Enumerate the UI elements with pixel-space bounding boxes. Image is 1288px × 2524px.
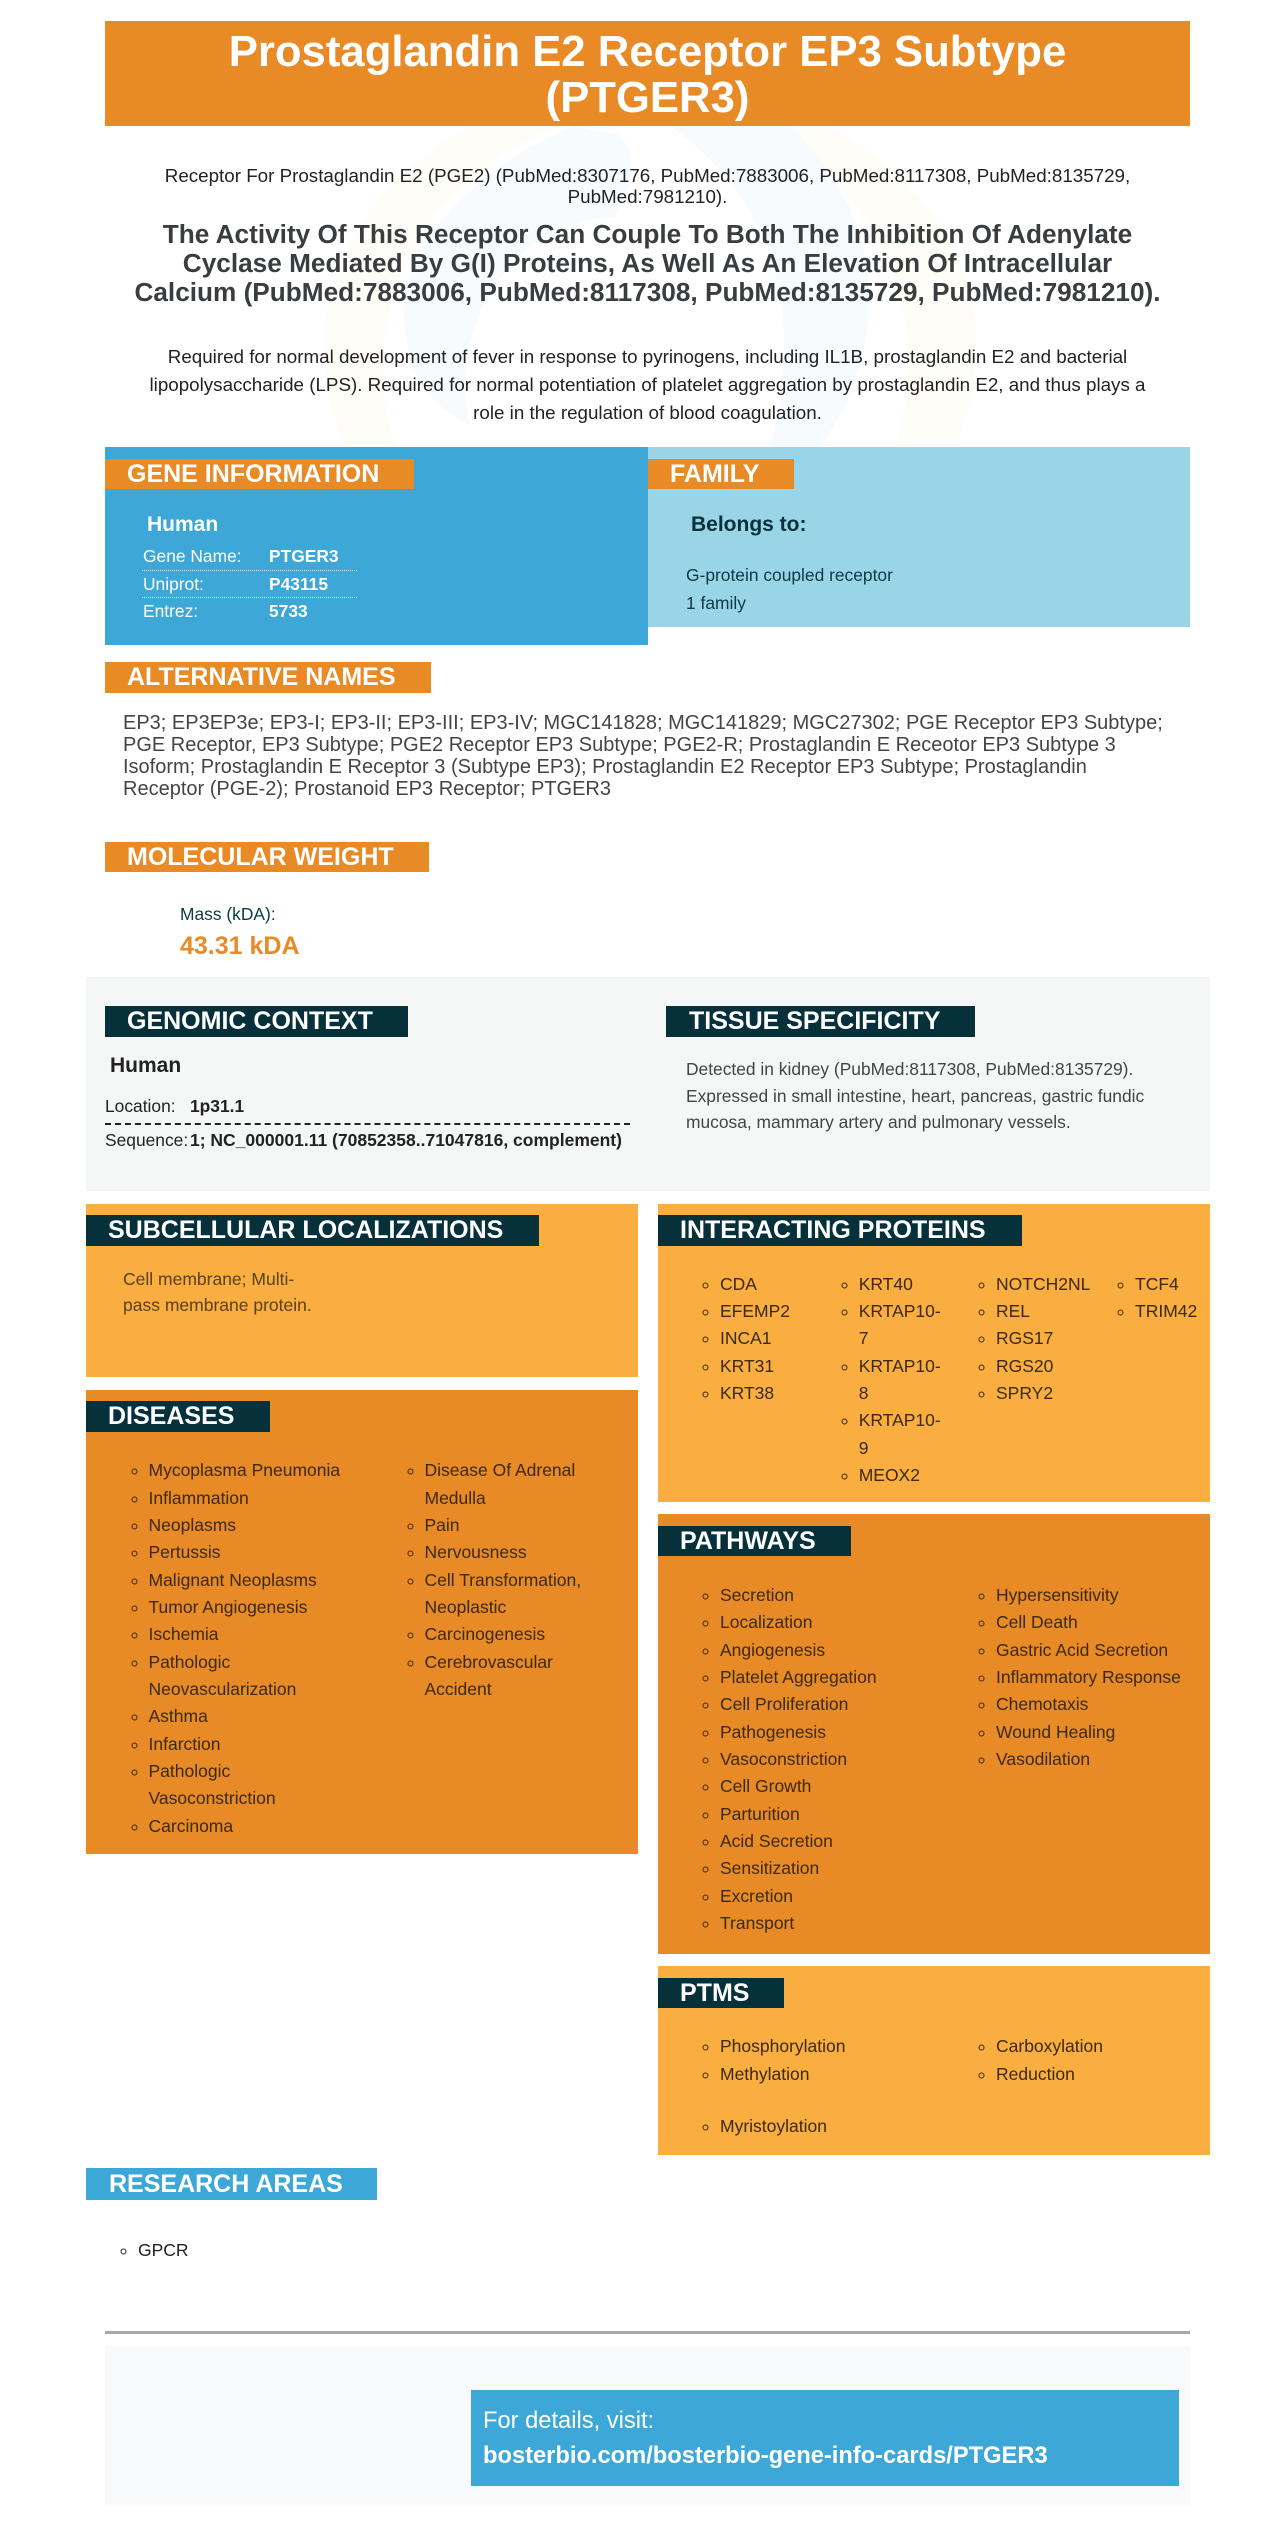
panel: genomic context and tissue specificity: 1; NC_000001.11 (70852358..71047816, complement) xyxy=(190,1130,622,1150)
list: diseases column 1: Asthma xyxy=(148,1706,208,1726)
panel: ptms xyxy=(658,1966,1210,2155)
list: proteins column 2: MEOX2 xyxy=(859,1465,920,1485)
list: proteins column 2: 9 xyxy=(859,1438,868,1458)
function description: role in the regulation of blood coagulation. xyxy=(473,402,822,422)
heading: alternative names: ALTERNATIVE NAMES xyxy=(127,663,396,691)
list: pathways column 2: Vasodilation xyxy=(996,1749,1090,1769)
callout: details link: bosterbio.com/bosterbio-gene-info-cards/PTGER3 xyxy=(483,2443,1048,2469)
list: diseases column 1: Pertussis xyxy=(148,1542,220,1562)
list: proteins column 1: EFEMP2 xyxy=(720,1301,790,1321)
list: pathways column 1: Angiogenesis xyxy=(720,1640,825,1660)
heading: genomic context: GENOMIC CONTEXT xyxy=(127,1007,373,1035)
list: pathways column 1: Transport xyxy=(720,1913,794,1933)
list: pathways column 1: Pathogenesis xyxy=(720,1722,826,1742)
alternative names text: PGE Receptor, EP3 Subtype; PGE2 Receptor EP3 Subtype; PGE2-R; Prostaglandin E Receotor EP3 Subtype 3 xyxy=(123,734,1116,756)
heading: pathways: PATHWAYS xyxy=(680,1527,816,1555)
list: proteins column 3 xyxy=(978,1274,1090,1403)
list: diseases column 2: Carcinogenesis xyxy=(424,1624,545,1644)
alternative names text: Isoform; Prostaglandin E Receptor 3 (Subtype EP3); Prostaglandin E2 Receptor EP3 Subtype; Prostaglandin xyxy=(123,756,1087,778)
list: diseases column 1: Vasoconstriction xyxy=(148,1788,276,1808)
list: proteins column 3: REL xyxy=(996,1301,1030,1321)
sequence: Sequence: xyxy=(105,1130,188,1150)
panel: genomic context and tissue specificity xyxy=(86,977,1210,1191)
panel: family xyxy=(648,447,1190,627)
location: Location: xyxy=(105,1096,176,1116)
list: pathways column 1 xyxy=(702,1585,877,1933)
list: proteins column 2 xyxy=(842,1274,941,1485)
tissue text: Expressed in small intestine, heart, pancreas, gastric fundic xyxy=(686,1086,1144,1106)
list: pathways column 1: Localization xyxy=(720,1612,812,1632)
list: proteins column 3: RGS17 xyxy=(996,1328,1053,1348)
list: diseases column 1: Infarction xyxy=(148,1734,220,1754)
list: diseases column 1: Malignant Neoplasms xyxy=(148,1570,317,1590)
list: pathways column 1: Platelet Aggregation xyxy=(720,1667,877,1687)
localization text: pass membrane protein. xyxy=(123,1295,312,1315)
heading: diseases: DISEASES xyxy=(108,1402,234,1430)
list: research areas: GPCR xyxy=(138,2240,189,2260)
tissue text xyxy=(686,1059,1144,1132)
list: diseases column 1: Carcinoma xyxy=(148,1816,233,1836)
localization text: Cell membrane; Multi- xyxy=(123,1269,294,1289)
title: (PTGER3) xyxy=(546,73,749,122)
panel: subcellular localizations xyxy=(86,1204,638,1377)
list: pathways column 1: Vasoconstriction xyxy=(720,1749,847,1769)
list: ptms column 1: Myristoylation xyxy=(720,2116,827,2136)
list: ptms column 2: Carboxylation xyxy=(996,2036,1103,2056)
heading: diseases xyxy=(86,1401,270,1432)
list: diseases column 2: Accident xyxy=(424,1679,492,1699)
bold function statement: Calcium (PubMed:7883006, PubMed:8117308, PubMed:8135729, PubMed:7981210). xyxy=(134,276,1161,306)
heading: gene information: GENE INFORMATION xyxy=(127,460,379,488)
list: pathways column 1: Parturition xyxy=(720,1804,800,1824)
heading: ptms xyxy=(658,1978,784,2008)
list: proteins column 2: KRTAP10- xyxy=(859,1356,941,1376)
list: diseases column 2: Medulla xyxy=(424,1488,486,1508)
list: pathways column 2: Chemotaxis xyxy=(996,1694,1088,1714)
list: pathways column 1: Cell Proliferation xyxy=(720,1694,848,1714)
alternative names text xyxy=(123,712,1163,800)
belongs to label: Belongs to: xyxy=(691,513,806,536)
function description: Required for normal development of fever in response to pyrinogens, including IL1B, prostaglandin E2 and bacterial xyxy=(168,346,1127,366)
panel: genomic context and tissue specificity: 1p31.1 xyxy=(190,1096,244,1116)
list: proteins column 4 xyxy=(1118,1274,1197,1321)
list: proteins column 2: KRTAP10- xyxy=(859,1410,941,1430)
list: diseases column 2: Neoplastic xyxy=(424,1597,506,1617)
bold function statement: Cyclase Mediated By G(I) Proteins, As Well As An Elevation Of Intracellular xyxy=(183,248,1112,278)
title: Prostaglandin E2 Receptor EP3 Subtype xyxy=(229,27,1066,76)
list: proteins column 1: INCA1 xyxy=(720,1328,772,1348)
list: diseases column 1: Pathologic xyxy=(148,1652,230,1672)
alternative names text: EP3; EP3EP3e; EP3-I; EP3-II; EP3-III; EP3-IV; MGC141828; MGC141829; MGC27302; PGE Receptor EP3 Subtype; xyxy=(123,712,1163,734)
list: diseases column 1: Neoplasms xyxy=(148,1515,236,1535)
list: proteins column 3: SPRY2 xyxy=(996,1383,1053,1403)
family name: 1 family xyxy=(686,593,746,613)
heading: interacting proteins: INTERACTING PROTEINS xyxy=(680,1216,986,1244)
heading: family xyxy=(648,459,794,489)
heading: research areas: RESEARCH AREAS xyxy=(109,2170,343,2198)
list: pathways column 2: Hypersensitivity xyxy=(996,1585,1119,1605)
mass value: 43.31 kDA xyxy=(180,932,300,960)
gene rows: PTGER3 xyxy=(269,546,339,566)
list: pathways column 1: Sensitization xyxy=(720,1858,819,1878)
gene rows xyxy=(142,546,357,621)
list: diseases column 1 xyxy=(132,1460,340,1836)
heading: tissue specificity: TISSUE SPECIFICITY xyxy=(689,1007,940,1035)
panel: footer xyxy=(105,2346,1190,2505)
heading: subcellular localizations: SUBCELLULAR LOCALIZATIONS xyxy=(108,1216,503,1244)
list: diseases column 1: Inflammation xyxy=(148,1488,249,1508)
panel: pathways xyxy=(658,1514,1210,1954)
intro text: Receptor For Prostaglandin E2 (PGE2) (PubMed:8307176, PubMed:7883006, PubMed:8117308, PubMed:8135729, xyxy=(165,165,1130,186)
list: proteins column 1: CDA xyxy=(720,1274,757,1294)
list: proteins column 1: KRT38 xyxy=(720,1383,774,1403)
list: ptms column 1: Phosphorylation xyxy=(720,2036,846,2056)
list: pathways column 1: Acid Secretion xyxy=(720,1831,833,1851)
list: diseases column 2: Pain xyxy=(424,1515,460,1535)
bold function statement xyxy=(134,218,1161,306)
gene rows: Entrez: xyxy=(143,601,198,621)
intro text: PubMed:7981210). xyxy=(568,186,727,207)
watermark logo xyxy=(0,0,1288,447)
function description xyxy=(149,346,1146,423)
species: Human xyxy=(110,1054,181,1077)
heading: molecular weight: MOLECULAR WEIGHT xyxy=(127,843,394,871)
callout: details link xyxy=(471,2390,1178,2486)
list: diseases column 2: Disease Of Adrenal xyxy=(424,1460,575,1480)
list: proteins column 2: KRT40 xyxy=(859,1274,913,1294)
list: diseases column 2: Cerebrovascular xyxy=(424,1652,553,1672)
list: proteins column 3: RGS20 xyxy=(996,1356,1053,1376)
list: diseases column 2: Nervousness xyxy=(424,1542,527,1562)
intro text xyxy=(165,165,1130,207)
list: proteins column 1: KRT31 xyxy=(720,1356,774,1376)
list: proteins column 4: TRIM42 xyxy=(1135,1301,1197,1321)
list: proteins column 2: KRTAP10- xyxy=(859,1301,941,1321)
family name: G-protein coupled receptor xyxy=(686,565,893,585)
species: Human xyxy=(147,513,218,536)
localization text xyxy=(123,1269,312,1315)
list: proteins column 2: 7 xyxy=(859,1328,868,1348)
list: proteins column 3: NOTCH2NL xyxy=(996,1274,1090,1294)
list: proteins column 1 xyxy=(702,1274,790,1403)
function description: lipopolysaccharide (LPS). Required for normal potentiation of platelet aggregation by prostaglandin E2, and thus plays a xyxy=(149,374,1146,394)
heading: ptms: PTMS xyxy=(680,1979,749,2007)
gene rows: 5733 xyxy=(269,601,308,621)
mass label: Mass (kDA): xyxy=(180,904,276,924)
panel: interacting proteins xyxy=(658,1204,1210,1502)
heading: family: FAMILY xyxy=(670,460,759,488)
list: diseases column 2: Cell Transformation, xyxy=(424,1570,581,1590)
list: ptms column 1: Methylation xyxy=(720,2064,810,2084)
tissue text: mucosa, mammary artery and pulmonary vessels. xyxy=(686,1112,1071,1132)
gene rows: P43115 xyxy=(269,574,328,594)
divider xyxy=(105,2331,1190,2334)
list: diseases column 1: Tumor Angiogenesis xyxy=(148,1597,307,1617)
list: diseases column 1: Neovascularization xyxy=(148,1679,296,1699)
list: ptms column 1 xyxy=(702,2036,846,2136)
list: pathways column 1: Excretion xyxy=(720,1886,793,1906)
list: diseases column 1: Pathologic xyxy=(148,1761,230,1781)
bold function statement: The Activity Of This Receptor Can Couple To Both The Inhibition Of Adenylate xyxy=(163,218,1132,248)
title xyxy=(105,21,1190,126)
list: pathways column 1: Secretion xyxy=(720,1585,794,1605)
list: pathways column 2 xyxy=(978,1585,1181,1769)
panel: diseases xyxy=(86,1390,638,1854)
list: proteins column 2: 8 xyxy=(859,1383,868,1403)
alternative names text: Receptor (PGE-2); Prostanoid EP3 Receptor; PTGER3 xyxy=(123,778,611,800)
list: pathways column 2: Cell Death xyxy=(996,1612,1078,1632)
gene rows: Gene Name: xyxy=(143,546,242,566)
tissue text: Detected in kidney (PubMed:8117308, PubMed:8135729). xyxy=(686,1059,1133,1079)
list: diseases column 1: Mycoplasma Pneumonia xyxy=(148,1460,340,1480)
list: diseases column 2 xyxy=(408,1460,581,1699)
list: pathways column 1: Cell Growth xyxy=(720,1776,811,1796)
gene rows: Uniprot: xyxy=(143,574,204,594)
list: proteins column 4: TCF4 xyxy=(1135,1274,1179,1294)
list: pathways column 2: Wound Healing xyxy=(996,1722,1115,1742)
list: pathways column 2: Gastric Acid Secretion xyxy=(996,1640,1168,1660)
list: diseases column 1: Ischemia xyxy=(148,1624,219,1644)
family name xyxy=(686,565,893,613)
list: ptms column 2: Reduction xyxy=(996,2064,1075,2084)
list: pathways column 2: Inflammatory Response xyxy=(996,1667,1181,1687)
panel: gene information xyxy=(105,447,648,645)
callout: details link: For details, visit: xyxy=(483,2408,654,2434)
list: ptms column 2 xyxy=(978,2036,1103,2084)
heading: pathways xyxy=(658,1526,851,1556)
